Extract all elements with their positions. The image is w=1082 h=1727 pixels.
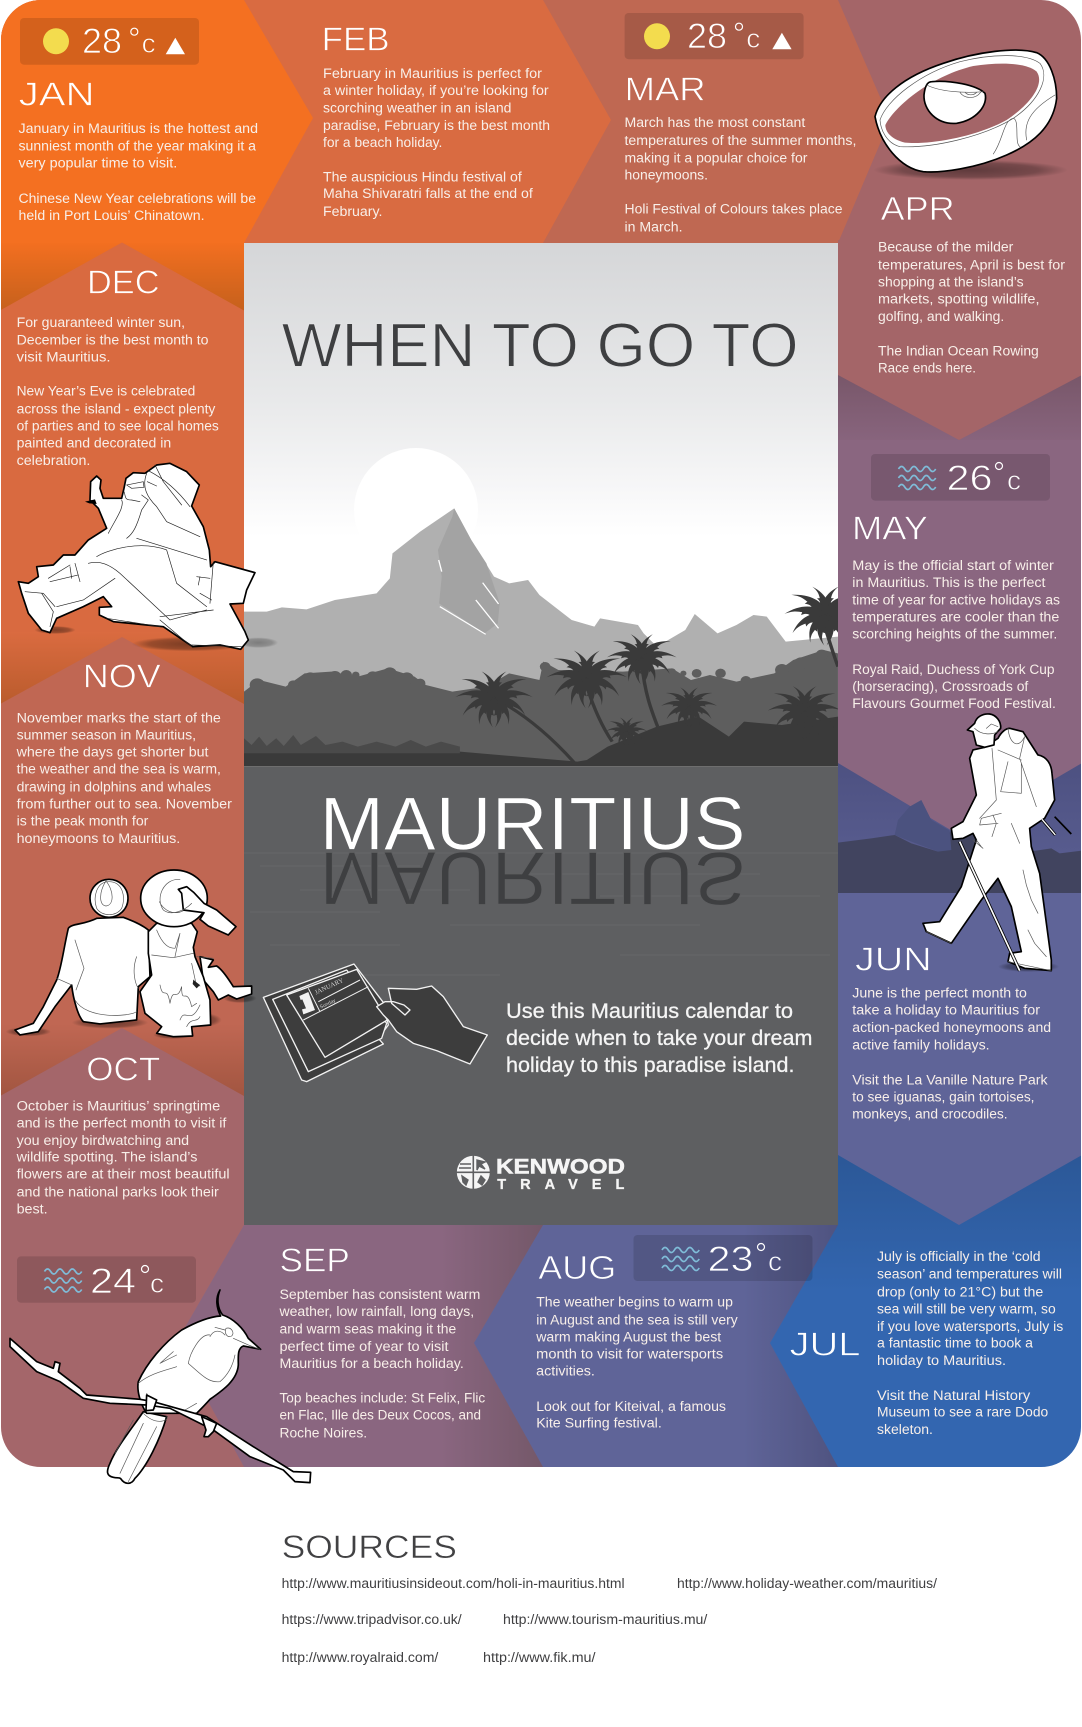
body: dec: across the island - expect plenty bbox=[17, 401, 216, 417]
body: sep: Top beaches include: St Felix, Flic bbox=[280, 1391, 485, 1407]
panel: jun bbox=[852, 940, 1051, 1122]
title reflection: MAURITIUS bbox=[320, 837, 746, 921]
heading: apr: APR bbox=[881, 190, 955, 227]
temperature badge: jan bbox=[20, 18, 199, 65]
body: may: Flavours Gourmet Food Festival. bbox=[852, 696, 1056, 712]
body: feb: a winter holiday, if you’re looking for bbox=[323, 83, 549, 99]
tagline bbox=[506, 999, 812, 1077]
body: dec bbox=[17, 315, 219, 469]
temperature badge: mar: c bbox=[746, 24, 760, 54]
body: may: in Mauritius. This is the perfect bbox=[852, 575, 1046, 591]
body: feb: scorching weather in an island bbox=[323, 100, 511, 116]
temperature badge: aug: c bbox=[768, 1246, 782, 1276]
panel: mar bbox=[624, 13, 856, 235]
body: nov: where the days get shorter but bbox=[16, 744, 209, 760]
body: feb: for a beach holiday. bbox=[323, 135, 442, 151]
sources links bbox=[282, 1576, 937, 1665]
body: apr: Because of the milder bbox=[878, 239, 1014, 255]
body: sep bbox=[279, 1287, 485, 1441]
body: jun: to see iguanas, gain tortoises, bbox=[852, 1090, 1034, 1106]
body: feb: The auspicious Hindu festival of bbox=[323, 170, 522, 186]
title: mauritius: MAURITIUS bbox=[320, 781, 746, 865]
body: dec: celebration. bbox=[17, 453, 90, 469]
strip: nov shadow bbox=[1, 653, 244, 704]
forest treetops bbox=[250, 650, 825, 687]
temperature badge: may: c bbox=[1007, 466, 1021, 496]
panel: jan bbox=[18, 18, 258, 224]
body: jul: season’ and temperatures will bbox=[877, 1266, 1062, 1282]
panel: jun chevron bbox=[838, 893, 1082, 1225]
sources links: http://www.mauritiusinsideout.com/holi-in-mauritius.html bbox=[282, 1576, 625, 1591]
woman arm bbox=[178, 887, 236, 935]
body: feb: February. bbox=[323, 204, 382, 220]
selfie phone bbox=[85, 499, 97, 504]
panel: may bbox=[852, 454, 1060, 712]
body: sep: Mauritius for a beach holiday. bbox=[280, 1356, 464, 1372]
body: oct: wildlife spotting. The island’s bbox=[16, 1149, 197, 1165]
water ripples bbox=[244, 853, 838, 975]
man hat bbox=[90, 879, 128, 917]
body: jan: Chinese New Year celebrations will be bbox=[18, 191, 256, 207]
selfie shadows bbox=[34, 626, 278, 651]
calendar day: Sunday bbox=[319, 998, 337, 1010]
strip: dec shadow bbox=[0, 243, 244, 313]
body: may: time of year for active holidays as bbox=[852, 593, 1060, 609]
body: oct bbox=[16, 1098, 230, 1218]
panel: aug bbox=[535, 1235, 812, 1432]
body: apr: shopping at the island’s bbox=[878, 274, 1024, 290]
body: aug: in August and the sea is still very bbox=[536, 1312, 739, 1328]
panel: aug background bbox=[474, 1225, 838, 1467]
small cup bbox=[924, 81, 986, 123]
body: jun: active family holidays. bbox=[852, 1038, 990, 1054]
temperature badge: oct: c bbox=[150, 1268, 164, 1298]
selfie details bbox=[25, 465, 242, 647]
body: nov: from further out to sea. November bbox=[17, 796, 232, 812]
sources section bbox=[282, 1529, 937, 1665]
selfie figures bbox=[18, 463, 255, 649]
heading: nov: NOV bbox=[83, 657, 161, 694]
body: may: (horseracing), Crossroads of bbox=[852, 679, 1028, 695]
body: mar: honeymoons. bbox=[624, 168, 708, 184]
body: feb: paradise, February is the best month bbox=[323, 118, 550, 134]
body: mar: Holi Festival of Colours takes place bbox=[624, 202, 843, 218]
hiker shadow bbox=[998, 961, 1059, 972]
palm tree 2 bbox=[546, 648, 627, 709]
heading: sep: SEP bbox=[280, 1242, 350, 1278]
palm tree 4 bbox=[784, 586, 838, 646]
bowl shadow bbox=[873, 160, 1068, 180]
body: feb bbox=[323, 66, 550, 220]
body: mar bbox=[624, 115, 856, 235]
body: feb: Maha Shivaratri falls at the end of bbox=[323, 186, 533, 202]
panel: jan background bbox=[0, 0, 313, 243]
dark foreground ground bbox=[244, 717, 838, 767]
panel: may chevron bbox=[838, 440, 1082, 835]
woman legs bbox=[200, 957, 252, 1000]
temperature badge: oct bbox=[17, 1256, 196, 1303]
logo wordmark: KENWOOD bbox=[496, 1155, 625, 1178]
temperature badge: jan: 28 bbox=[82, 22, 122, 61]
panel: feb background bbox=[0, 0, 611, 243]
body: jan: very popular time to visit. bbox=[18, 156, 177, 172]
temperature badge: may: 26 bbox=[946, 459, 992, 498]
palm tree 1 bbox=[455, 669, 533, 728]
bowl rim lines bbox=[880, 56, 1055, 154]
panel: central hero sky bbox=[244, 243, 838, 767]
body: jun: take a holiday to Mauritius for bbox=[852, 1002, 1040, 1018]
panel: mar background bbox=[0, 0, 890, 243]
body: jul bbox=[877, 1249, 1063, 1438]
tagline: Use this Mauritius calendar to bbox=[506, 999, 793, 1023]
icon: coconut bowl bbox=[873, 50, 1068, 180]
body: feb: February in Mauritius is perfect for bbox=[323, 66, 542, 82]
body: jun: Visit the La Vanille Nature Park bbox=[852, 1072, 1048, 1088]
panel: sep bbox=[279, 1242, 485, 1441]
far mountains bbox=[244, 508, 838, 767]
body: aug: month to visit for watersports bbox=[536, 1346, 723, 1362]
body: jan: sunniest month of the year making it a bbox=[18, 138, 256, 154]
logo emblem bbox=[456, 1155, 491, 1190]
panel: jul background bbox=[770, 1150, 1082, 1467]
body: apr: golfing, and walking. bbox=[878, 309, 1004, 325]
body: mar: in March. bbox=[624, 219, 682, 235]
body: oct: October is Mauritius’ springtime bbox=[17, 1098, 220, 1114]
panel: jun sky bbox=[838, 763, 1081, 854]
panel: nov background bbox=[1, 637, 244, 1024]
body: nov: the weather and the sea is warm, bbox=[17, 762, 221, 778]
woman hat bbox=[141, 870, 207, 927]
pack pole cap bbox=[1042, 819, 1055, 835]
palm trunks bbox=[494, 623, 838, 763]
body: sep: perfect time of year to visit bbox=[280, 1339, 449, 1355]
pole behind pack bbox=[1042, 819, 1055, 835]
body: may: May is the official start of winter bbox=[852, 558, 1054, 574]
woman dress bbox=[140, 923, 211, 1037]
body: may: temperatures are cooler than the bbox=[852, 609, 1059, 625]
body: nov: is the peak month for bbox=[17, 814, 149, 830]
sun bbox=[354, 448, 478, 572]
palm bush 2 bbox=[607, 718, 646, 742]
body: jul: holiday to Mauritius. bbox=[877, 1353, 1006, 1369]
body: oct: and the national parks look their bbox=[17, 1185, 219, 1201]
bird details bbox=[115, 1327, 260, 1482]
heading: mar: MAR bbox=[625, 71, 706, 108]
heading: jan: JAN bbox=[19, 75, 95, 112]
panel: jun mountains bbox=[838, 800, 1082, 893]
body: dec: of parties and to see local homes bbox=[17, 418, 219, 434]
temperature badge: mar bbox=[625, 13, 804, 59]
body: apr: markets, spotting wildlife, bbox=[878, 292, 1040, 308]
woman strap bbox=[193, 980, 200, 988]
panel: apr background bbox=[838, 0, 1081, 240]
tagline: decide when to take your dream bbox=[506, 1026, 812, 1050]
body: jul: July is officially in the ‘cold bbox=[877, 1249, 1041, 1265]
body: oct: and is the perfect month to visit if bbox=[17, 1115, 226, 1131]
panel: dec bbox=[17, 263, 219, 469]
body: may: scorching heights of the summer. bbox=[852, 627, 1057, 643]
body: sep: and warm seas making it the bbox=[280, 1322, 456, 1338]
calendar month: JANUARY bbox=[314, 977, 345, 996]
body: dec: December is the best month to bbox=[17, 332, 209, 348]
body: aug: The weather begins to warm up bbox=[536, 1294, 733, 1310]
body: dec: visit Mauritius. bbox=[17, 349, 111, 365]
branch bbox=[10, 1338, 311, 1483]
icon: calendar and hand bbox=[263, 964, 487, 1082]
temperature badge: jan: c bbox=[142, 29, 156, 59]
body: apr: temperatures, April is best for bbox=[878, 258, 1065, 274]
body: jan bbox=[18, 121, 258, 224]
sources links: http://www.tourism-mauritius.mu/ bbox=[503, 1612, 708, 1627]
body: aug: Look out for Kiteival, a famous bbox=[536, 1399, 726, 1415]
rear trekking pole bbox=[1055, 817, 1071, 834]
mountain highlights bbox=[439, 560, 499, 634]
man body bbox=[15, 917, 150, 1035]
body: jun: June is the perfect month to bbox=[852, 986, 1027, 1002]
strip: may shadow bbox=[838, 375, 1081, 440]
illustration: selfie couple bbox=[18, 463, 278, 651]
body: jul: a fantastic time to book a bbox=[877, 1336, 1033, 1352]
body: nov: drawing in dolphins and whales bbox=[17, 779, 211, 795]
tagline: holiday to this paradise island. bbox=[506, 1053, 794, 1077]
body: sep: en Flac, Ille des Deux Cocos, and bbox=[280, 1408, 481, 1424]
panel: dec background bbox=[1, 242, 244, 632]
panel: apr bbox=[878, 190, 1065, 377]
body: jul: sea will still be very warm, so bbox=[877, 1302, 1056, 1318]
couple shadows bbox=[6, 994, 257, 1039]
body: nov: November marks the start of the bbox=[17, 710, 221, 726]
body: may: Royal Raid, Duchess of York Cup bbox=[852, 662, 1055, 678]
hiker body and backpack bbox=[923, 728, 1055, 971]
bird tail bbox=[108, 1412, 167, 1483]
sources links: http://www.fik.mu/ bbox=[483, 1650, 596, 1665]
temperature badge: mar: 28 bbox=[687, 17, 727, 56]
body: nov bbox=[16, 710, 232, 847]
illustration: couple sitting bbox=[6, 870, 257, 1039]
body: jul: drop (only to 21°C) but the bbox=[877, 1284, 1043, 1300]
body: jul: Museum to see a rare Dodo bbox=[877, 1405, 1048, 1421]
body: jan: January in Mauritius is the hottest and bbox=[18, 121, 258, 137]
heading: jul: JUL bbox=[790, 1325, 860, 1362]
strip: oct shadow bbox=[1, 1044, 244, 1096]
panel: sep background bbox=[176, 1225, 543, 1467]
body: aug: warm making August the best bbox=[535, 1330, 721, 1346]
temperature badge: may bbox=[871, 454, 1050, 501]
body: aug: Kite Surfing festival. bbox=[536, 1416, 662, 1432]
panel: nov bbox=[16, 657, 232, 847]
body: sep: September has consistent warm bbox=[280, 1287, 480, 1303]
illustration: hiker bbox=[923, 714, 1071, 972]
body: sep: Roche Noires. bbox=[280, 1425, 367, 1441]
body: aug bbox=[535, 1294, 739, 1432]
bird feet bbox=[146, 1395, 217, 1437]
body: jul: skeleton. bbox=[877, 1422, 933, 1438]
heading: dec: DEC bbox=[87, 263, 160, 300]
body: jan: held in Port Louis’ Chinatown. bbox=[18, 208, 204, 224]
body: may bbox=[852, 558, 1060, 712]
grass bbox=[244, 735, 460, 753]
woman details bbox=[152, 879, 213, 1027]
calendar date block bbox=[303, 980, 368, 1020]
sources links: http://www.royalraid.com/ bbox=[282, 1650, 439, 1665]
front trekking pole bbox=[960, 842, 1020, 971]
palm bush 3 bbox=[768, 686, 838, 724]
panel: jul bbox=[790, 1249, 1063, 1438]
body: jul: Visit the Natural History bbox=[877, 1388, 1031, 1404]
body: nov: summer season in Mauritius, bbox=[17, 727, 196, 743]
body: oct: flowers are at their most beautiful bbox=[17, 1167, 230, 1183]
heading: oct: OCT bbox=[86, 1050, 160, 1088]
forest layer bbox=[244, 650, 838, 767]
panel: apr chevron bbox=[838, 240, 1082, 440]
hiker head and cap bbox=[967, 714, 1001, 747]
logo: kenwood travel bbox=[456, 1155, 625, 1193]
sources links: https://www.tripadvisor.co.uk/ bbox=[282, 1612, 462, 1627]
body: apr: The Indian Ocean Rowing bbox=[878, 344, 1039, 360]
body: apr: Race ends here. bbox=[878, 361, 976, 377]
body: jun: monkeys, and crocodiles. bbox=[852, 1106, 1008, 1122]
body: jun bbox=[852, 986, 1051, 1122]
hiker details bbox=[926, 724, 1051, 971]
heading: feb: FEB bbox=[322, 21, 390, 58]
title: when to go to: WHEN TO GO TO bbox=[282, 311, 799, 380]
bowl inner bbox=[885, 64, 1039, 143]
panel: feb bbox=[322, 21, 550, 220]
landscape illustration bbox=[244, 508, 867, 767]
panel: oct background bbox=[0, 1028, 244, 1467]
bird body bbox=[138, 1290, 261, 1413]
body: aug: activities. bbox=[536, 1364, 595, 1380]
heading: may: MAY bbox=[852, 509, 928, 546]
temperature badge: oct: 24 bbox=[90, 1262, 136, 1301]
body: sep: weather, low rainfall, long days, bbox=[279, 1304, 474, 1320]
body: nov: honeymoons to Mauritius. bbox=[17, 831, 180, 847]
body: oct: best. bbox=[17, 1202, 48, 1218]
palm tree 3 bbox=[607, 632, 677, 685]
sources heading: SOURCES bbox=[282, 1529, 457, 1565]
body: jul: if you love watersports, July is bbox=[877, 1319, 1063, 1335]
palm bush 1 bbox=[662, 688, 716, 722]
bowl outer bbox=[875, 50, 1057, 172]
panel: central hero water bbox=[244, 767, 838, 1225]
sources links: http://www.holiday-weather.com/mauritius/ bbox=[677, 1576, 937, 1591]
man details bbox=[57, 881, 138, 1015]
body: jun: action-packed honeymoons and bbox=[852, 1020, 1051, 1036]
body: mar: temperatures of the summer months, bbox=[624, 133, 856, 149]
body: dec: painted and decorated in bbox=[17, 436, 171, 452]
mountain face bbox=[438, 508, 500, 633]
panel: oct bbox=[16, 1050, 230, 1303]
body: apr bbox=[878, 239, 1065, 377]
temperature badge: aug bbox=[634, 1235, 812, 1281]
heading: aug: AUG bbox=[538, 1249, 616, 1286]
body: dec: For guaranteed winter sun, bbox=[17, 315, 185, 331]
body: mar: making it a popular choice for bbox=[624, 151, 808, 167]
body: oct: you enjoy birdwatching and bbox=[17, 1133, 189, 1149]
logo subtitle: TRAVEL bbox=[497, 1177, 624, 1193]
temperature badge: aug: 23 bbox=[708, 1240, 754, 1279]
hand bbox=[377, 986, 487, 1064]
heading: jun: JUN bbox=[855, 940, 932, 977]
illustration: crested bird on branch bbox=[10, 1290, 311, 1483]
body: dec: New Year’s Eve is celebrated bbox=[17, 383, 195, 399]
body: mar: March has the most constant bbox=[624, 115, 805, 131]
